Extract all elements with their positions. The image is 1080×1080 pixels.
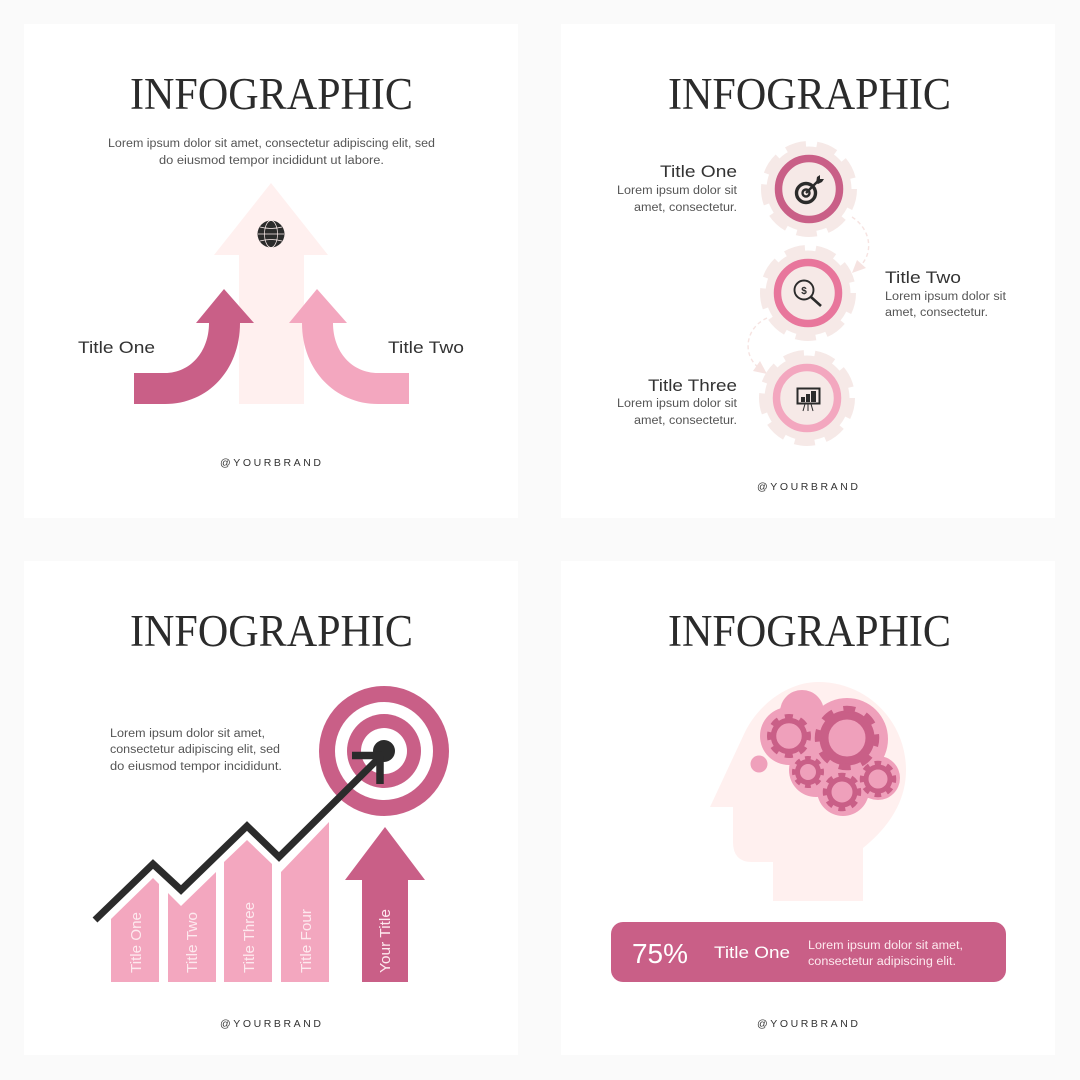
text: title three bbox=[617, 376, 738, 427]
panel: gear process bbox=[561, 24, 1055, 518]
heading: INFOGRAPHIC bbox=[130, 606, 413, 656]
intro text bbox=[108, 138, 435, 167]
icon: dart target bbox=[796, 175, 824, 202]
arrow: dashed gear two to three bbox=[748, 318, 767, 374]
intro text bbox=[110, 728, 282, 773]
bar: title one: Title One bbox=[128, 912, 145, 973]
brain cloud bbox=[750, 690, 900, 816]
intro text: Lorem ipsum dolor sit amet, bbox=[110, 728, 265, 740]
stat value: 75% bbox=[632, 938, 688, 969]
arrow: dashed gear one to two bbox=[852, 217, 869, 273]
heading: INFOGRAPHIC bbox=[668, 69, 951, 119]
gear one bbox=[765, 145, 853, 233]
text: title two: Title Two bbox=[885, 268, 961, 287]
heading: INFOGRAPHIC bbox=[130, 69, 413, 119]
text: title one: Lorem ipsum dolor sit bbox=[617, 185, 738, 197]
panel: merging arrows bbox=[24, 24, 518, 518]
arrow: large central bbox=[214, 183, 328, 404]
brand handle: @YOURBRAND bbox=[220, 457, 321, 469]
bar: title three bbox=[224, 840, 272, 982]
target bbox=[319, 686, 449, 816]
gear: large bbox=[818, 709, 876, 767]
label: title two: Title Two bbox=[388, 338, 464, 357]
stat bar bbox=[611, 922, 1006, 982]
stat text: consectetur adipiscing elit. bbox=[808, 956, 956, 968]
heading: INFOGRAPHIC bbox=[668, 606, 951, 656]
arrow: your title bbox=[345, 827, 425, 982]
head silhouette bbox=[710, 682, 906, 901]
gear: small centre bbox=[794, 758, 822, 786]
arrow: your title: Your Title bbox=[377, 909, 394, 973]
gear: bottom bbox=[825, 775, 859, 809]
bar: title four bbox=[281, 822, 329, 982]
panel: growth chart bbox=[24, 561, 518, 1055]
text: title one bbox=[617, 162, 738, 214]
arrow: trend line bbox=[95, 756, 382, 920]
stat text: Lorem ipsum dolor sit amet, bbox=[808, 940, 963, 952]
bar: title one bbox=[111, 878, 159, 982]
icon: magnifier with dollar bbox=[794, 280, 821, 306]
bar: title two: Title Two bbox=[184, 912, 201, 973]
icon: globe bbox=[258, 220, 284, 248]
gear three bbox=[763, 354, 851, 442]
intro text: consectetur adipiscing elit, sed bbox=[110, 744, 280, 756]
text: title three: Lorem ipsum dolor sit bbox=[617, 398, 738, 410]
stat title: Title One bbox=[714, 943, 790, 962]
text: title three: Title Three bbox=[648, 376, 737, 395]
intro text: do eiusmod tempor incididunt ut labore. bbox=[159, 155, 384, 167]
bar: title four: Title Four bbox=[298, 909, 315, 973]
bar: title three: Title Three bbox=[241, 902, 258, 973]
brand handle: @YOURBRAND bbox=[757, 1018, 858, 1030]
text: title three: amet, consectetur. bbox=[634, 415, 737, 427]
icon: magnifier with dollar: $ bbox=[801, 286, 807, 297]
arrow: right curved bbox=[289, 289, 409, 404]
text: title one: Title One bbox=[660, 162, 737, 181]
gear: right bbox=[862, 763, 894, 795]
panel: head with gears bbox=[561, 561, 1055, 1055]
label: title one: Title One bbox=[78, 338, 155, 357]
brand handle: @YOURBRAND bbox=[757, 481, 858, 493]
gear: left bbox=[770, 716, 808, 756]
intro text: Lorem ipsum dolor sit amet, consectetur adipiscing elit, sed bbox=[108, 138, 435, 150]
text: title one: amet, consectetur. bbox=[634, 202, 737, 214]
intro text: do eiusmod tempor incididunt. bbox=[110, 761, 282, 773]
icon: presentation board bbox=[798, 388, 820, 411]
bar: title two bbox=[168, 872, 216, 982]
arrow: left curved bbox=[134, 289, 254, 404]
brand handle: @YOURBRAND bbox=[220, 1018, 321, 1030]
text: title two: Lorem ipsum dolor sit bbox=[885, 291, 1007, 303]
text: title two: amet, consectetur. bbox=[885, 307, 988, 319]
text: title two bbox=[885, 268, 1007, 319]
gear two bbox=[764, 249, 852, 337]
stat text bbox=[808, 940, 963, 968]
